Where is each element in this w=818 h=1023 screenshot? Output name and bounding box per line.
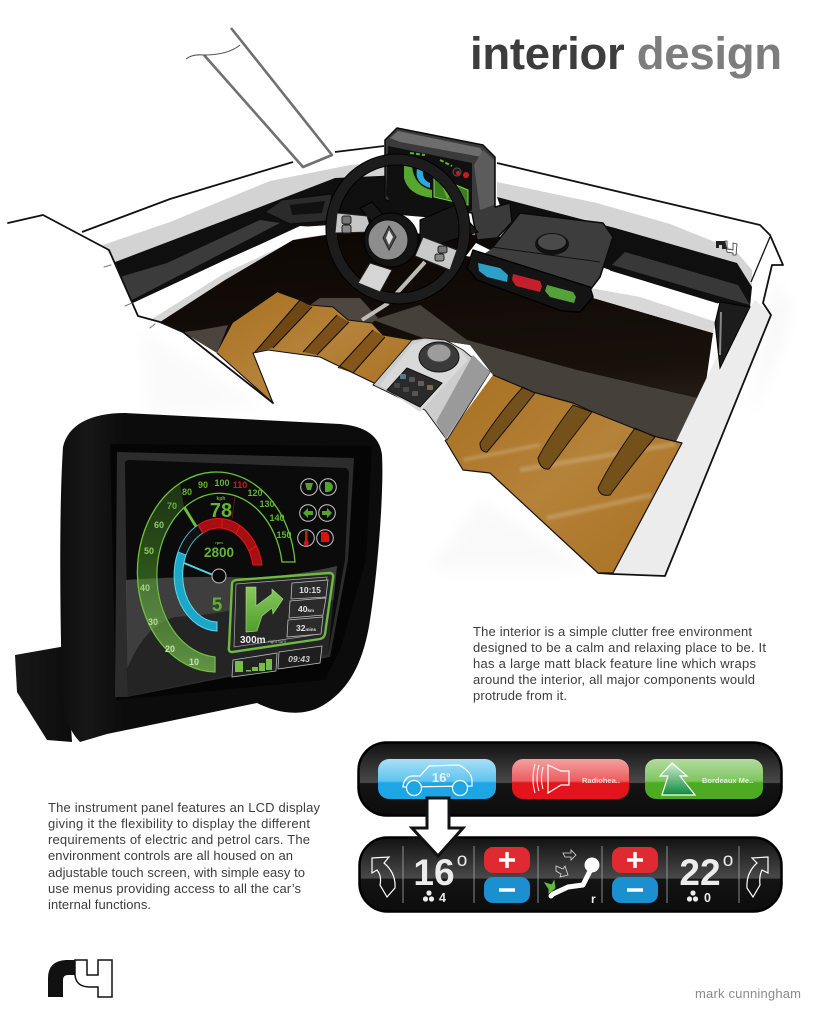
speed scale numbers: kph: [217, 496, 225, 502]
right temperature: 22: [679, 852, 721, 893]
description: instrument panel: internal functions.: [48, 897, 151, 912]
hub with badge: [364, 213, 418, 267]
turn arrow: [246, 587, 283, 632]
left dashboard white band: [82, 146, 384, 262]
rotary knob: [419, 342, 459, 372]
marker smudges around the sketch: [140, 280, 792, 570]
steering column stalks: [360, 202, 478, 250]
interior sketch illustration: [8, 28, 792, 576]
rev counter arc: [174, 518, 262, 631]
panel bezel: [60, 413, 382, 742]
description: instrument panel: [48, 800, 320, 912]
speed scale numbers: 70: [167, 501, 177, 511]
speed scale numbers: 110: [233, 480, 247, 490]
instrument pod: [385, 128, 512, 240]
left temperature: 4: [439, 891, 446, 905]
screen gloss: [126, 566, 337, 696]
trip boxes: [287, 580, 328, 637]
description: instrument panel: adjustable touch screen, with simple easy to: [48, 865, 305, 880]
left black feature band: [115, 175, 400, 303]
right temperature: o: [723, 850, 733, 871]
speed scale numbers: 50: [144, 546, 154, 556]
description: interior: around the interior, all major components would: [473, 672, 755, 687]
r4 logo: [48, 960, 112, 997]
right wood floor panel: [445, 375, 682, 573]
speed scale numbers: rpm: [215, 540, 223, 545]
description: instrument panel: requirements of electric and petrol cars. The: [48, 832, 310, 847]
speed scale numbers: 100: [214, 478, 230, 488]
description: instrument panel: giving it the flexibility to display the different: [48, 816, 310, 831]
left temperature: [413, 850, 467, 905]
blue climate button: 16: [432, 770, 446, 785]
navigation panel: 32mins: [296, 623, 316, 633]
screen surround: [110, 444, 372, 700]
right spoke: [415, 237, 457, 270]
left plus and minus buttons: [484, 847, 530, 903]
clock box: [278, 646, 322, 669]
panel base foot: [15, 646, 72, 742]
centre switch box: [466, 213, 613, 290]
door handle: [265, 194, 332, 224]
speed scale numbers: 120: [247, 488, 263, 498]
speed scale numbers: 5: [212, 595, 223, 616]
speed scale numbers: 130: [259, 499, 275, 509]
air direction seat icon: [545, 850, 600, 906]
fuel level box: [232, 653, 277, 677]
left spoke: [335, 213, 372, 233]
author credit: mark cunningham: [695, 986, 801, 1001]
lower spoke: [358, 263, 392, 292]
green navigation button: Bordeaux Me..: [702, 776, 753, 785]
speed scale numbers: 80: [182, 487, 192, 497]
small r4 logo on dashboard: [716, 241, 737, 255]
centre console with rotary knob and keypad: [373, 338, 490, 440]
navigation panel: [229, 573, 333, 652]
speed scale numbers: [140, 478, 292, 667]
blue climate button: o: [446, 773, 450, 779]
windscreen pillar: [186, 28, 332, 167]
description: interior: The interior is a simple clutter free environment: [473, 624, 752, 639]
back arrow: [372, 857, 395, 897]
bottom climate control bar: [360, 838, 782, 912]
speed scale numbers: 20: [165, 644, 175, 654]
speed scale numbers: 60: [154, 520, 164, 530]
green navigation button: [645, 759, 763, 799]
right dashboard white band: [497, 163, 783, 576]
speed scale numbers: 90: [198, 480, 208, 490]
navigation panel: 10:15: [299, 585, 321, 595]
right temperature: 0: [704, 891, 711, 905]
keypad: [387, 368, 442, 407]
right temperature: [679, 850, 733, 905]
red audio button: Radiohea..: [582, 776, 620, 785]
title: interior design: [470, 28, 782, 79]
speed scale numbers: 150: [276, 530, 292, 540]
left lower white strip: [133, 224, 345, 322]
LCD display: [125, 460, 349, 696]
description: interior: has a large matt black feature line which wraps: [473, 656, 756, 671]
left wood floor panel: [217, 292, 412, 403]
instrument panel render: [15, 413, 382, 742]
right air vent: [715, 302, 750, 368]
navigation panel: 300m right turn: [240, 635, 287, 646]
description: instrument panel: use menus providing access to all the car’s: [48, 881, 302, 896]
left temperature: o: [457, 850, 467, 871]
arrow linking the menu to climate controls: [412, 798, 463, 856]
right plus and minus buttons: [612, 847, 658, 903]
left temperature: 16: [413, 852, 455, 893]
speed scale numbers: 10: [189, 657, 199, 667]
speed scale numbers: 78: [210, 500, 232, 522]
cabin floor: [160, 232, 713, 443]
description: instrument panel: The instrument panel features an LCD display: [48, 800, 320, 815]
red audio button: [512, 759, 629, 799]
description: interior: protrude from it.: [473, 688, 567, 703]
speed scale numbers: 2800: [204, 545, 234, 560]
right black feature band: [497, 197, 752, 307]
speed scale numbers: 30: [148, 617, 158, 627]
steering wheel: [316, 145, 480, 313]
right lower white strip: [590, 270, 718, 333]
dashboard control strip with three buttons: [467, 250, 593, 312]
speed scale numbers: 40: [140, 583, 150, 593]
air direction seat icon: r: [591, 892, 596, 906]
description: instrument panel: environment controls are all housed on an: [48, 848, 293, 863]
warning icons: [298, 479, 336, 546]
description: interior: [473, 624, 766, 703]
forward arrow: [747, 857, 768, 897]
pod screen contents: [404, 153, 469, 205]
clock box: 09:43: [288, 654, 310, 664]
centre tunnel strip: [362, 262, 425, 320]
navigation panel: 40km: [298, 604, 314, 614]
speedometer arc: [137, 472, 295, 672]
top touch-screen menu bar: [358, 742, 782, 816]
description: interior: designed to be a calm and relaxing place to be. It: [473, 640, 766, 655]
speed scale numbers: 140: [269, 513, 285, 523]
blue climate button: [378, 759, 496, 799]
outer body lines: [8, 215, 273, 403]
